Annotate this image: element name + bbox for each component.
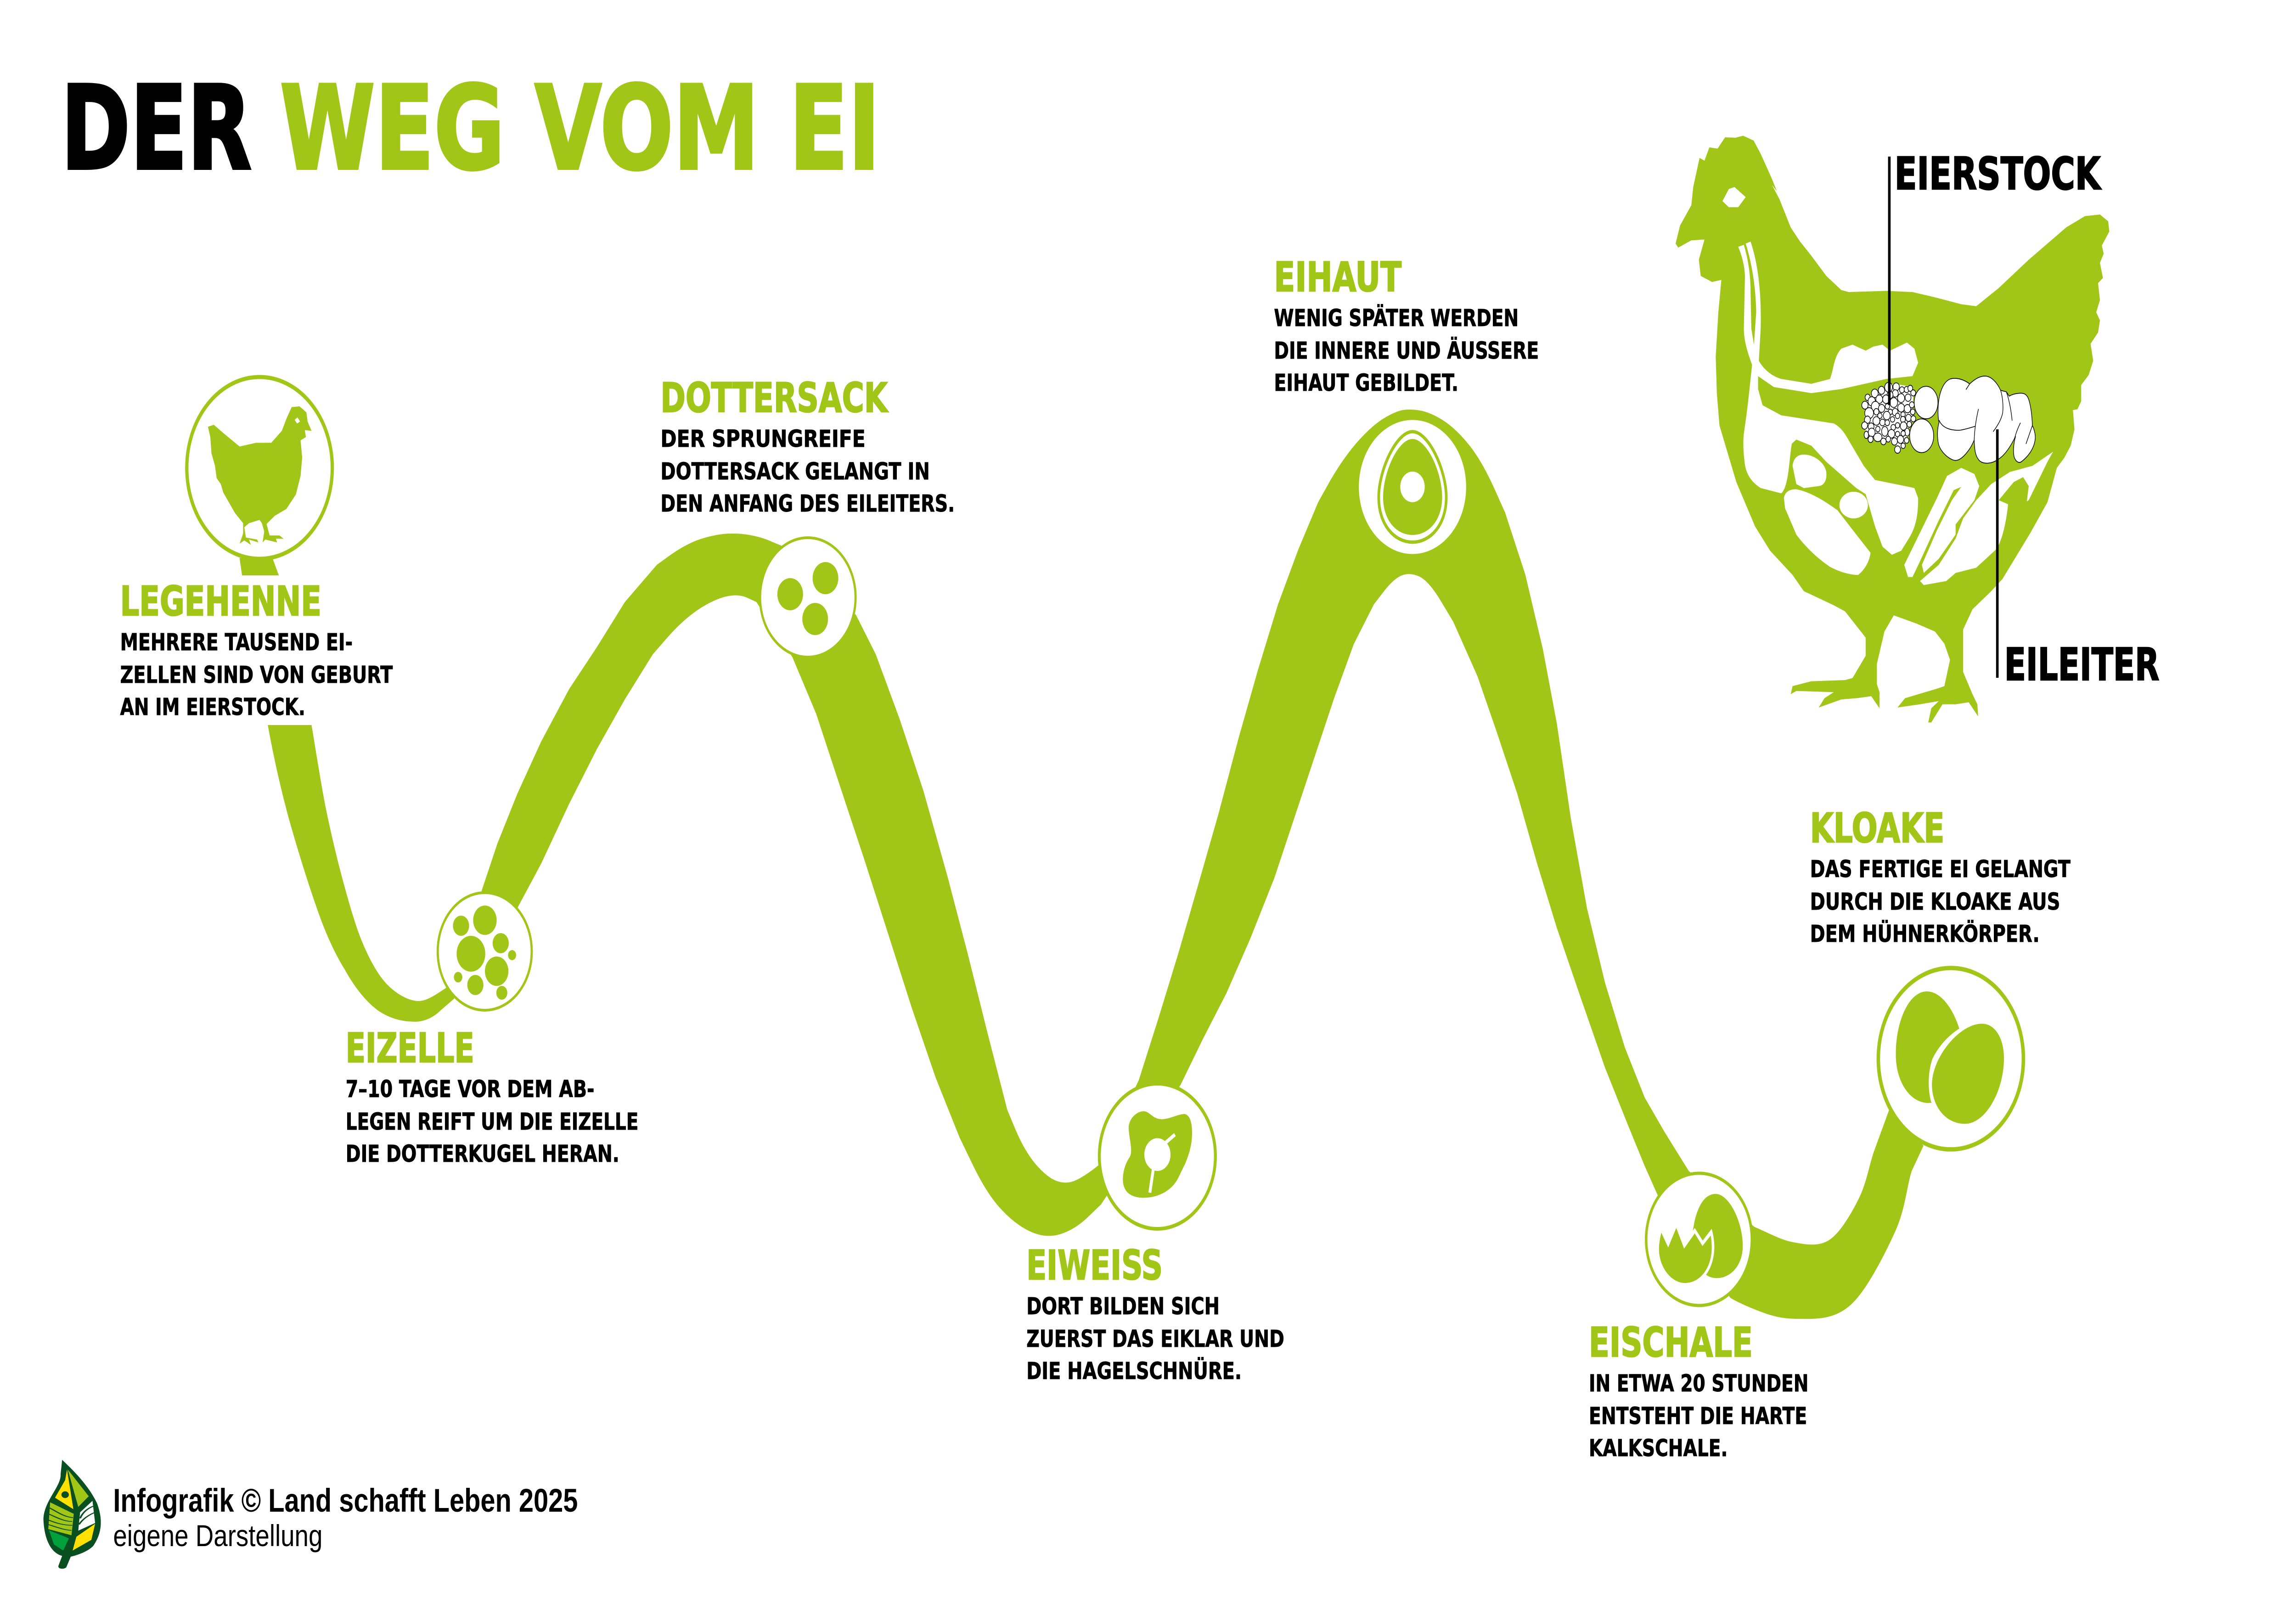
text: eizelle: LEGEN REIFT UM DIE EIZELLE <box>346 1108 638 1135</box>
text: kloake: KLOAKE <box>1810 805 1944 852</box>
icon: egg white with chalazae <box>1099 1084 1216 1229</box>
step 1: legehenne <box>120 377 393 720</box>
text: eischale <box>1589 1319 1808 1462</box>
icon: two eggs <box>1878 968 2023 1149</box>
title: DER <box>61 61 252 196</box>
chicken silhouette with internal organs <box>1676 135 2109 722</box>
callout: eileiter <box>1996 429 2159 691</box>
text: legehenne: ZELLEN SIND VON GEBURT <box>120 661 393 688</box>
step 7: kloake <box>1810 805 2071 1149</box>
text: kloake: DEM HÜHNERKÖRPER. <box>1810 920 2040 947</box>
text: eiweiss: DORT BILDEN SICH <box>1026 1293 1220 1320</box>
step 6: eischale <box>1589 1173 1808 1462</box>
text: dottersack <box>660 374 955 517</box>
text: kloake <box>1810 805 2071 947</box>
chicken anatomy diagram <box>1676 135 2159 722</box>
text: kloake: DAS FERTIGE EI GELANGT <box>1810 855 2071 883</box>
text: eizelle <box>346 1024 638 1167</box>
text: eizelle: 7–10 TAGE VOR DEM AB- <box>346 1075 594 1103</box>
text: eischale: ENTSTEHT DIE HARTE <box>1589 1402 1807 1429</box>
text: eiweiss: DIE HAGELSCHNÜRE. <box>1026 1357 1242 1384</box>
callout: eierstock <box>1888 147 2102 405</box>
ovary: follicle cluster <box>1862 376 2035 463</box>
text: eischale: EISCHALE <box>1589 1319 1753 1366</box>
icon stem <box>240 558 279 575</box>
icon: hen in circle <box>187 377 332 559</box>
icon: cracked egg shell <box>1646 1173 1752 1306</box>
text: dottersack: DOTTERSACK <box>660 374 889 422</box>
text: credit <box>113 1482 578 1553</box>
text: eiweiss: EIWEISS <box>1026 1242 1163 1289</box>
icon: egg with membranes <box>1359 420 1466 554</box>
callout: eierstock: EIERSTOCK <box>1895 147 2102 200</box>
icon: yolk sacs <box>760 538 855 657</box>
text: credit: eigene Darstellung <box>113 1519 322 1553</box>
text: eischale: IN ETWA 20 STUNDEN <box>1589 1370 1808 1397</box>
text: eiweiss: ZUERST DAS EIKLAR UND <box>1026 1325 1284 1352</box>
text: eizelle: EIZELLE <box>346 1024 474 1072</box>
text: eihaut: WENIG SPÄTER WERDEN <box>1274 304 1519 332</box>
text: dottersack: DER SPRUNGREIFE <box>660 425 866 452</box>
callout: eileiter: EILEITER <box>2004 638 2159 691</box>
text: legehenne: LEGEHENNE <box>120 578 321 625</box>
text: kloake: DURCH DIE KLOAKE AUS <box>1810 888 2060 915</box>
text: legehenne: AN IM EIERSTOCK. <box>120 693 305 720</box>
oviduct ribbon path <box>268 410 1924 1319</box>
text: eiweiss <box>1026 1242 1284 1384</box>
text: eihaut: EIHAUT GEBILDET. <box>1274 369 1458 396</box>
footer <box>44 1460 578 1569</box>
text: legehenne: MEHRERE TAUSEND EI- <box>120 629 353 656</box>
text: eischale: KALKSCHALE. <box>1589 1435 1728 1462</box>
step 5: eiweiss <box>1026 1084 1284 1384</box>
step 3: dottersack <box>660 374 955 657</box>
icon: leaf logo <box>44 1460 101 1569</box>
text: eizelle: DIE DOTTERKUGEL HERAN. <box>346 1140 619 1167</box>
icon: egg cells <box>438 893 532 1010</box>
text: legehenne <box>120 578 393 720</box>
text: eihaut <box>1274 253 1539 396</box>
step 2: eizelle <box>346 893 638 1167</box>
text: eihaut: EIHAUT <box>1274 253 1401 301</box>
title: WEG VOM EI <box>280 61 880 196</box>
text: dottersack: DOTTERSACK GELANGT IN <box>660 458 930 485</box>
text: dottersack: DEN ANFANG DES EILEITERS. <box>660 490 955 517</box>
step 4: eihaut <box>1274 253 1539 554</box>
text: credit: Infografik © Land schafft Leben 2025 <box>113 1482 578 1519</box>
text: eihaut: DIE INNERE UND ÄUSSERE <box>1274 337 1539 364</box>
title <box>61 61 880 196</box>
